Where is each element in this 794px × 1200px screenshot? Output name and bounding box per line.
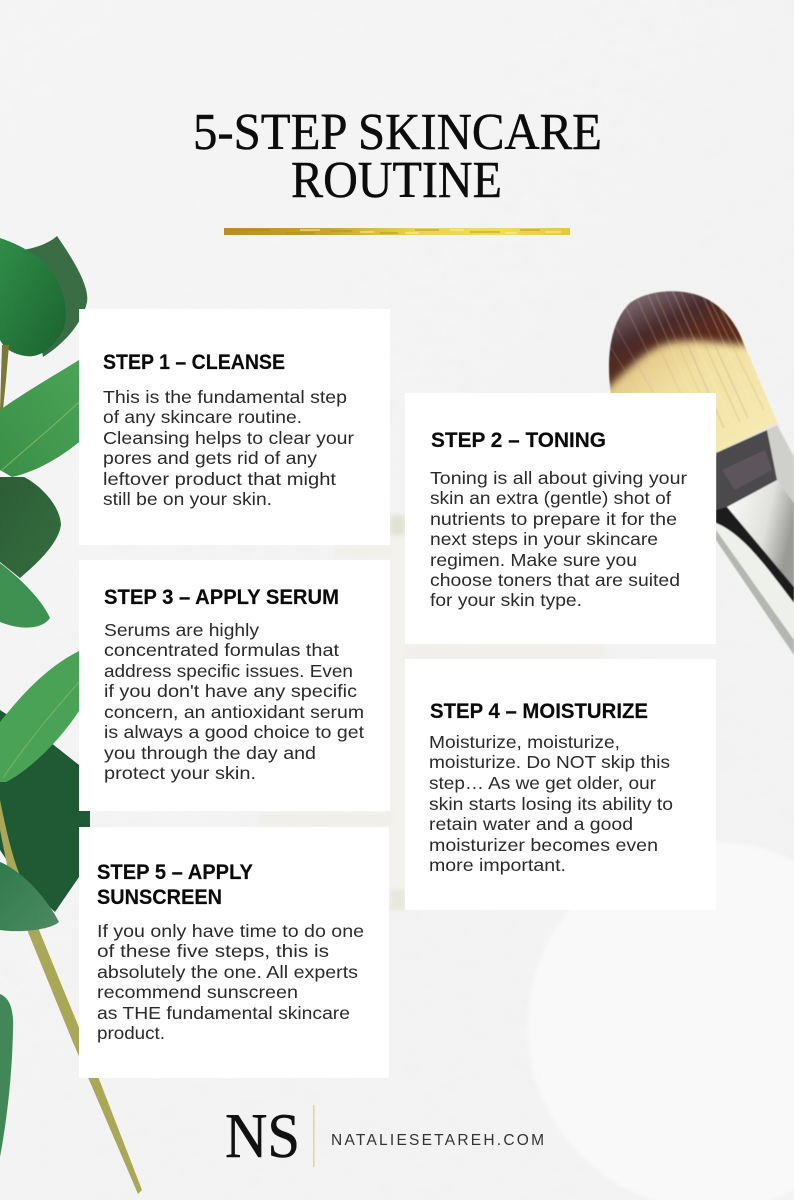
- text: step 1 body: pores and gets rid of any: [103, 448, 317, 468]
- icon: brush bristles: [608, 290, 778, 456]
- heading: step 3: STEP 3 – APPLY SERUM: [104, 586, 339, 609]
- title: [193, 104, 602, 209]
- panel: step 4 moisturize: [405, 659, 716, 910]
- stem: main: [0, 800, 142, 1194]
- text: step 2 body: choose toners that are suited: [430, 570, 680, 590]
- text: step 2 body: for your skin type.: [430, 590, 582, 610]
- heading: step 5: STEP 5 – APPLY: [97, 861, 253, 884]
- text: step 3 body: protect your skin.: [104, 763, 256, 783]
- logo monogram: NS: [225, 1100, 300, 1171]
- text: step 3 body: if you don't have any specific: [104, 681, 357, 701]
- icon: brush ferrule: [716, 423, 794, 655]
- text: step 4 body: step… As we get older, our: [429, 773, 656, 793]
- text: step 1 body: still be on your skin.: [103, 489, 272, 509]
- panel: step 5 apply sunscreen: [79, 827, 389, 1078]
- text: step 5 body: absolutely the one. All experts: [97, 962, 358, 982]
- text: step 2 body: [430, 468, 687, 610]
- makeup brush: [600, 280, 794, 655]
- text: step 4 body: [429, 732, 673, 875]
- text: step 5 body: [97, 921, 364, 1043]
- text: step 4 body: more important.: [429, 855, 566, 875]
- leaf: bright upper: [0, 651, 79, 782]
- eucalyptus branch: [0, 236, 142, 1194]
- text: step 1 body: of any skincare routine.: [103, 407, 302, 427]
- heading: step 2: STEP 2 – TONING: [431, 429, 606, 452]
- heading: step 5: [97, 861, 253, 909]
- text: step 1 body: [103, 387, 354, 509]
- text: step 1 body: This is the fundamental step: [103, 387, 347, 407]
- panel: step 1 cleanse: [79, 309, 390, 545]
- cream jar behind the panels: [258, 515, 605, 910]
- leaf: second green: [0, 360, 79, 477]
- text: step 3 body: concern, an antioxidant serum: [104, 702, 364, 722]
- stem: upper: [0, 345, 9, 410]
- heading: step 5: SUNSCREEN: [97, 886, 222, 909]
- leaf: small green: [0, 563, 50, 628]
- text: step 3 body: concentrated formulas that: [104, 640, 339, 660]
- text: step 3 body: you through the day and: [104, 743, 316, 763]
- text: step 2 body: regimen. Make sure you: [430, 550, 637, 570]
- text: step 5 body: If you only have time to do one: [97, 921, 364, 941]
- leaf: lower cluster: [0, 862, 59, 931]
- text: step 1 body: leftover product that might: [103, 469, 336, 489]
- text: step 3 body: [104, 620, 364, 783]
- title: 5-STEP SKINCARE: [193, 104, 602, 161]
- website: NATALIESETAREH.COM: [331, 1132, 544, 1149]
- panel: step 3 apply serum: [79, 560, 390, 811]
- text: step 2 body: skin an extra (gentle) shot of: [430, 488, 671, 508]
- text: step 4 body: Moisturize, moisturize,: [429, 732, 620, 752]
- text: step 3 body: is always a good choice to get: [104, 722, 364, 742]
- gold divider: [224, 228, 570, 235]
- text: step 5 body: recommend sunscreen: [97, 982, 298, 1002]
- leaf: bottom left: [0, 994, 13, 1157]
- text: step 2 body: next steps in your skincare: [430, 529, 658, 549]
- leaf: top green: [0, 238, 66, 356]
- text: step 5 body: as THE fundamental skincare: [97, 1003, 350, 1023]
- logo: NS monogram and website: [225, 1100, 544, 1171]
- panel: step 2 toning: [405, 393, 716, 644]
- text: step 4 body: skin starts losing its ability to: [429, 794, 673, 814]
- leaf: dark middle: [0, 477, 61, 578]
- text: step 5 body: product.: [97, 1023, 165, 1043]
- text: step 5 body: of these five steps, this is: [97, 941, 329, 961]
- text: step 2 body: Toning is all about giving your: [430, 468, 687, 488]
- text: step 1 body: Cleansing helps to clear your: [103, 428, 354, 448]
- text: step 4 body: moisturize. Do NOT skip this: [429, 752, 670, 772]
- text: step 4 body: retain water and a good: [429, 814, 633, 834]
- heading: step 4: STEP 4 – MOISTURIZE: [430, 700, 648, 723]
- text: step 2 body: nutrients to prepare it for the: [430, 509, 677, 529]
- leaf: dark large lower: [0, 710, 90, 912]
- title: ROUTINE: [291, 152, 502, 209]
- cotton pad: [528, 842, 794, 1200]
- leaf: dark back top: [23, 236, 87, 357]
- text: step 4 body: moisturizer becomes even: [429, 835, 658, 855]
- heading: step 1: STEP 1 – CLEANSE: [103, 351, 285, 374]
- text: step 3 body: address specific issues. Even: [104, 661, 353, 681]
- text: step 3 body: Serums are highly: [104, 620, 259, 640]
- logo gold line: [313, 1105, 314, 1167]
